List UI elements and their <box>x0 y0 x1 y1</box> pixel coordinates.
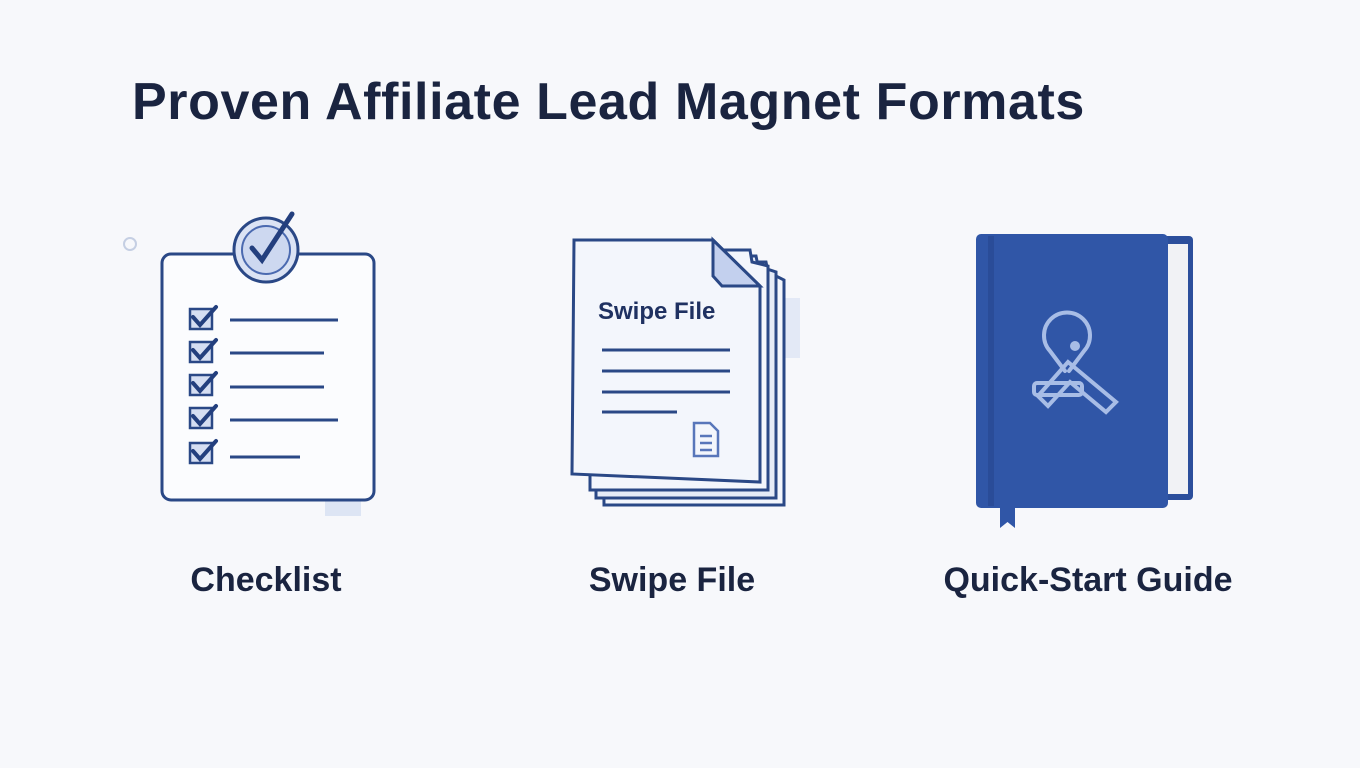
label: swipe file: Swipe File <box>589 561 755 599</box>
icon: quick-start guide book <box>976 234 1193 528</box>
label: quick-start guide: Quick-Start Guide <box>943 561 1233 599</box>
label: checklist: Checklist <box>190 561 342 599</box>
icon: swipe file stack <box>572 240 800 505</box>
title: Proven Affiliate Lead Magnet Formats <box>132 73 1085 131</box>
icon: checklist <box>124 214 374 516</box>
text: swipe file on page: Swipe File <box>598 298 715 325</box>
